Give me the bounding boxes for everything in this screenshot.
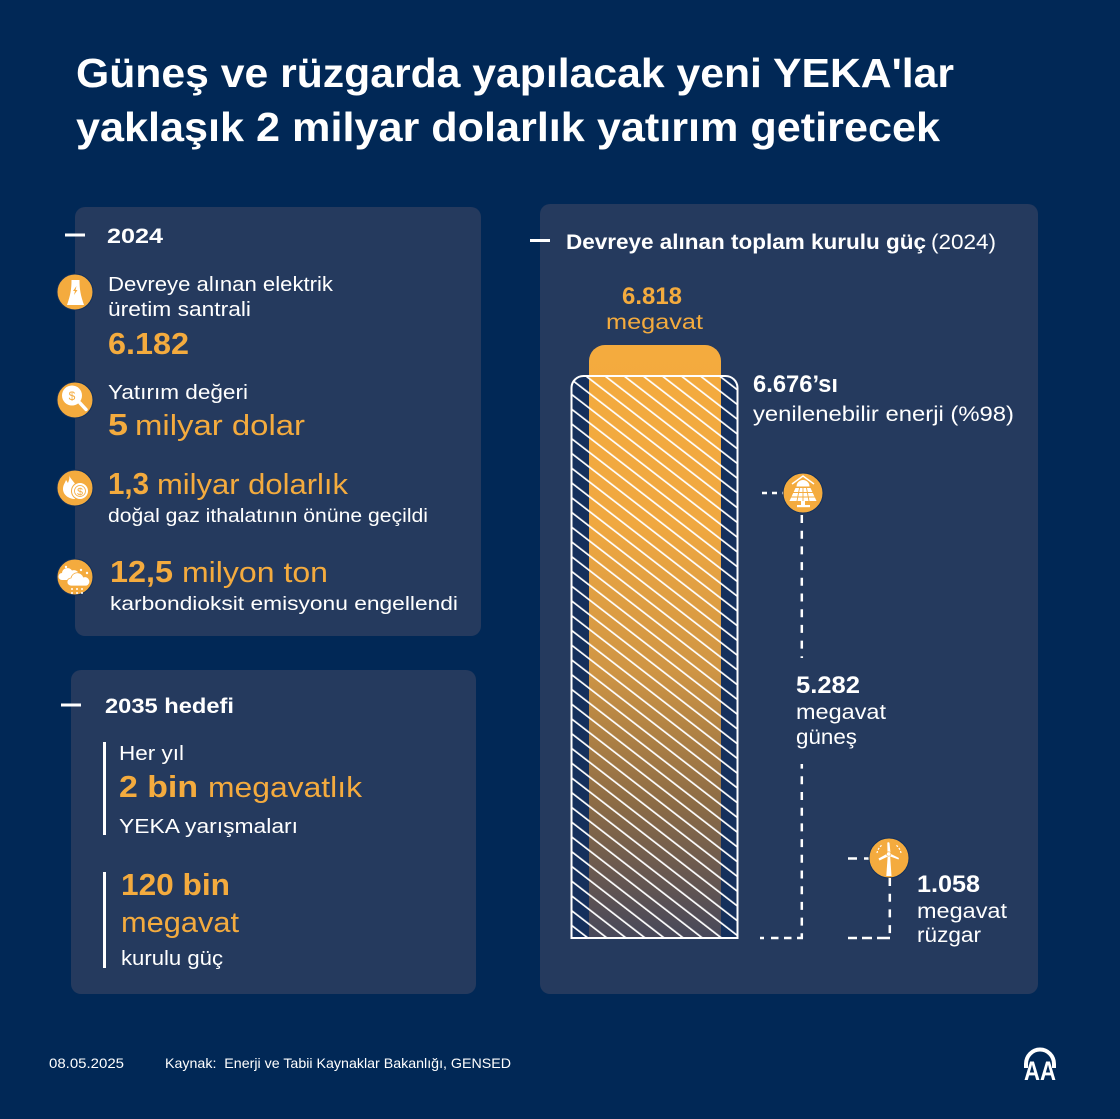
text: investment value [108,382,305,442]
label: solar: megavat [796,701,886,724]
icon: emission clouds [57,559,93,595]
text: power plants: üretim santrali [108,299,251,321]
text: yearly tenders [103,742,363,838]
heading: 2035 hedefi: 2035 hedefi [105,695,234,718]
label: renewable share [753,371,1014,426]
arrow: wind connector [848,878,890,938]
text: installed capacity goal: kurulu güç [121,948,223,970]
heading: installed capacity: Devreye alınan toplam kurulu güç [566,231,926,254]
footer source: Kaynak: Enerji ve Tabii Kaynaklar Bakanlığı, GENSED [165,1055,511,1071]
text: investment value: 5 [108,407,128,442]
text: gas imports [108,466,428,527]
text: power plants: 6.182 [108,326,189,361]
panel: total installed capacity [530,204,1038,994]
title: yaklaşık 2 milyar dolarlık yatırım getirecek [76,104,940,150]
label: solar: güneş [796,726,857,749]
panel: 2035 target [61,670,476,994]
icon: gas flame and coin: $ [77,486,83,498]
text: installed capacity goal: megavat [121,907,239,939]
icon: wind turbine [848,838,909,878]
heading: 2024: 2024 [107,225,163,248]
icon: investment magnifier [57,382,93,418]
label: wind: 1.058 [917,871,980,898]
heading: installed capacity: (2024) [931,231,996,254]
footer date: 08.05.2025 [49,1055,124,1071]
arrow: solar connector [760,515,803,938]
text: power plants: Devreye alınan elektrik [108,274,334,296]
text: yearly tenders: megavatlık [208,772,363,804]
text: power plants [108,274,334,361]
text: yearly tenders: 2 bin [119,769,198,804]
label: wind: megavat [917,900,1007,923]
text: investment value: Yatırım değeri [108,382,248,404]
icon: solar panel [762,473,823,513]
label: renewable share: yenilenebilir enerji (%98) [753,402,1014,426]
text: carbon emissions: 12,5 [110,554,173,589]
bar chart: total and renewable capacity [572,345,738,938]
panel: 2024 [57,207,481,636]
text: carbon emissions: karbondioksit emisyonu engellendi [110,593,458,615]
text: gas imports: milyar dolarlık [157,469,349,501]
icon: gas flame and coin [57,470,93,506]
logo: AA [1024,1050,1056,1086]
title [76,50,954,150]
label: renewable share: 6.676’sı [753,371,838,398]
label: solar: 5.282 [796,672,860,699]
heading: 2035 hedefi [61,695,234,718]
title: Güneş ve rüzgarda yapılacak yeni YEKA'lar [76,50,954,96]
icon: investment magnifier: $ [69,389,76,403]
text: yearly tenders: YEKA yarışmaları [119,816,298,838]
text: gas imports: doğal gaz ithalatının önüne geçildi [108,505,428,527]
label: wind: rüzgar [917,924,981,947]
text: investment value: milyar dolar [135,410,305,442]
icon: power plant [57,274,93,310]
heading: 2024 [65,225,163,248]
text: gas imports: 1,3 [108,466,149,501]
label: total 6.818 megawatt [606,283,703,334]
label: wind [917,871,1007,947]
text: carbon emissions: milyon ton [182,557,328,589]
text: yearly tenders: Her yıl [119,743,184,765]
text: carbon emissions [110,554,458,615]
text: installed capacity goal: 120 bin [121,867,230,902]
label: solar [796,672,886,749]
label: total 6.818 megawatt: 6.818 [622,283,682,310]
text: installed capacity goal [103,867,239,970]
label: total 6.818 megawatt: megavat [606,311,703,334]
logo: AA: AA [1024,1056,1056,1086]
